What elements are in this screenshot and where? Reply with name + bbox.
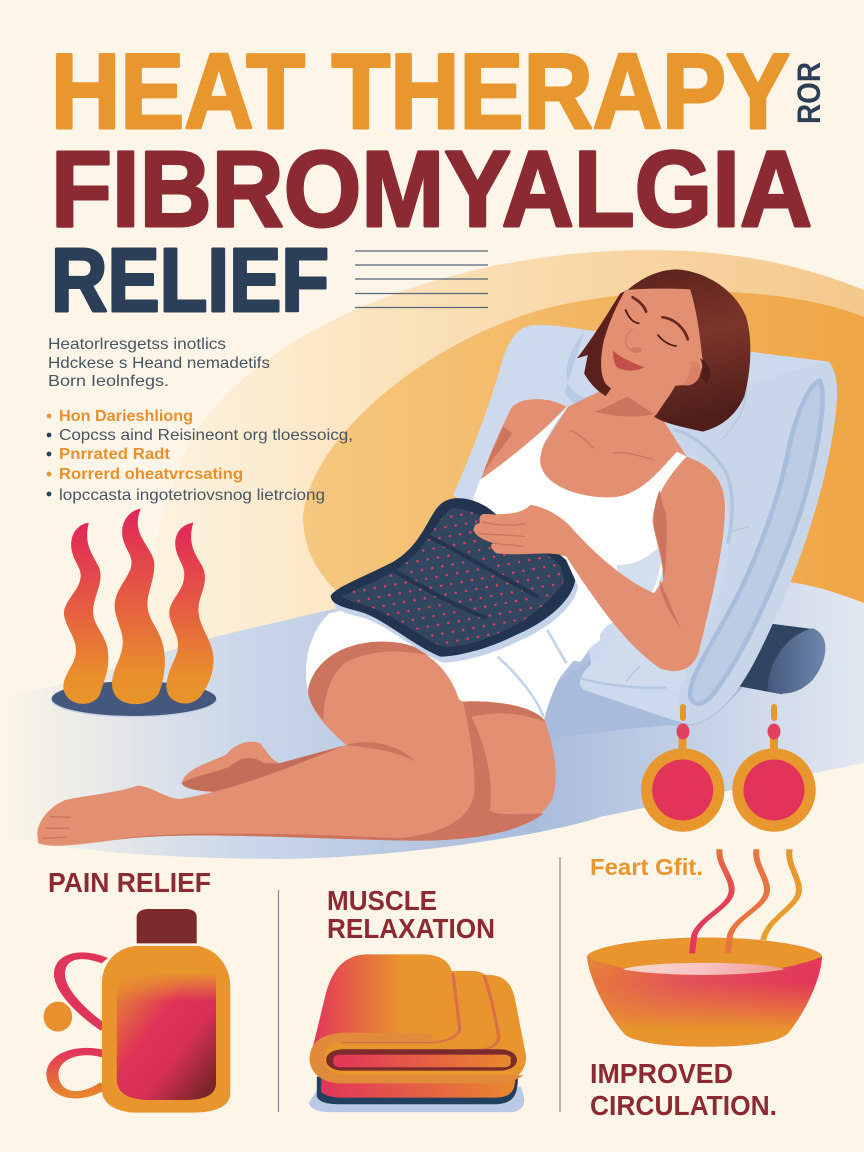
icon: folded towel — [309, 954, 526, 1112]
bullet list: Pnrrated Radt — [59, 446, 171, 463]
tank top — [473, 407, 687, 662]
divider — [559, 857, 561, 1112]
heading: muscle relaxation — [327, 885, 495, 944]
far arm and shoulder — [480, 399, 566, 483]
title line: relief: RELIEF — [51, 231, 329, 331]
background shape: inner orange arc — [303, 291, 864, 640]
intro paragraph — [48, 336, 270, 390]
legs — [37, 642, 556, 846]
bullet list: Rorrerd oheatvrcsating — [59, 466, 243, 483]
heading: pain relief: PAIN RELIEF — [48, 867, 211, 898]
bullet list — [47, 408, 353, 504]
icon: three flames on a dish — [51, 508, 217, 717]
neck — [595, 377, 681, 415]
panel: improved circulation — [587, 849, 822, 1121]
icon: hot water bottle — [44, 909, 230, 1113]
reclining chair — [453, 325, 837, 724]
intro paragraph: Heatorlresgetss inotlics — [48, 336, 226, 353]
bolster roll — [732, 623, 825, 694]
background shape: outer warm arc — [140, 250, 864, 700]
panel: muscle relaxation — [309, 885, 526, 1112]
chest and neck — [534, 387, 687, 508]
title — [51, 31, 827, 331]
divider — [278, 890, 280, 1112]
near leg — [37, 642, 556, 846]
heading: muscle relaxation: MUSCLE — [327, 885, 437, 916]
heading: improved circulation: IMPROVED — [590, 1058, 733, 1089]
near arm — [473, 457, 725, 671]
heading: muscle relaxation: RELAXATION — [327, 913, 495, 944]
far foot — [182, 742, 346, 792]
ear — [683, 361, 701, 385]
illustration: reclining woman with heating pad — [37, 269, 837, 846]
bullet list: lopccasta ingotetriovsnog lietrciong — [59, 487, 325, 504]
heading: improved circulation: CIRCULATION. — [590, 1090, 777, 1121]
title line: fibromyalgia: FIBROMYALGIA — [51, 128, 812, 249]
title line: heat therapy: HEAT THERAPY — [51, 31, 790, 151]
eyes, brows, nose, mouth — [626, 310, 676, 346]
leg shading — [308, 642, 432, 720]
decorative ruled lines — [355, 251, 488, 308]
shorts — [306, 580, 600, 722]
title line: rotated ror: ROR — [791, 62, 827, 124]
orange label: Feart Gfit. — [590, 854, 703, 880]
heating pad — [331, 498, 578, 663]
torso with arm, tank top and head — [331, 269, 750, 671]
panel: pain relief — [44, 867, 230, 1113]
chair shadow on floor — [545, 593, 753, 740]
back hair — [624, 269, 750, 432]
hand on pad — [473, 505, 573, 557]
left hair strands — [577, 288, 631, 396]
blue floor — [0, 582, 864, 859]
face — [601, 289, 703, 394]
heading: improved circulation — [590, 1058, 777, 1121]
icon: steaming bowl — [587, 849, 822, 1047]
intro paragraph: Born Ieolnfegs. — [48, 373, 169, 390]
bullet list: Hon Darieshliong — [59, 408, 193, 425]
intro paragraph: Hdckese s Heand nemadetifs — [48, 355, 270, 372]
icon: pair of round ornaments — [641, 704, 816, 832]
bullet list: Copcss aind Reisineont org tloessoicg, — [59, 427, 353, 444]
